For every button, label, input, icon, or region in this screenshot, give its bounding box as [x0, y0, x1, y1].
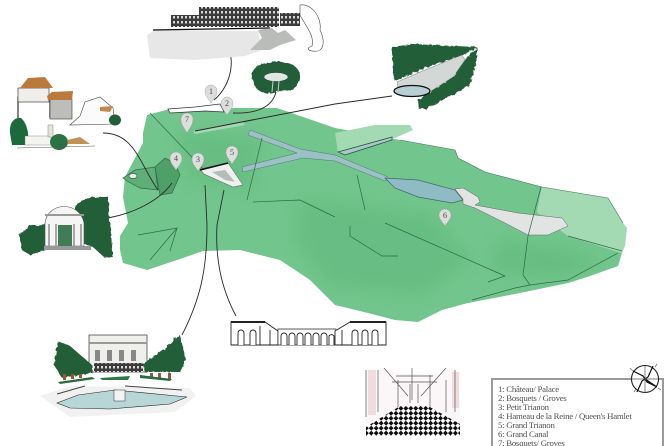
legend box: 2: Bosquets / Groves: [498, 393, 567, 403]
illustration: Hall of Mirrors gallery: [366, 368, 460, 436]
map: palace gardens: [120, 104, 627, 322]
illustration: Temple of Love: [19, 197, 113, 258]
legend box: 5: Grand Trianon: [498, 420, 555, 430]
illustration: grove with basin: [392, 44, 477, 109]
Grand Canal: [242, 130, 568, 235]
illustration: fountain grove: [252, 62, 300, 93]
legend box: 4: Hameau de la Reine / Queen's Hamlet: [498, 411, 632, 421]
pin 3: [192, 153, 204, 171]
green park area: [120, 108, 622, 322]
illustration: Hameau de la Reine: [10, 77, 121, 150]
light green estate areas: [193, 122, 627, 253]
pin 5: [226, 146, 238, 164]
location pins: [170, 85, 451, 226]
illustration: Grand Trianon: [231, 322, 386, 345]
pin 1: 1: [209, 87, 213, 96]
legend box: 3: Petit Trianon: [498, 402, 549, 412]
pin 4: 4: [174, 154, 178, 163]
Hameau grove: [123, 158, 180, 195]
pin 2: [221, 97, 233, 115]
pin 2: 2: [225, 99, 229, 108]
pin 6: 6: [443, 211, 447, 220]
pin 3: 3: [196, 155, 200, 164]
pin 6: [439, 209, 451, 226]
legend box: [491, 378, 664, 446]
callout lines: [103, 37, 392, 335]
legend box: 6: Grand Canal: [498, 429, 548, 439]
legend box: 1: Château/ Palace: [498, 384, 559, 394]
pin 4: [170, 152, 182, 170]
pin 7: [181, 113, 193, 133]
pin 5: 5: [230, 148, 234, 157]
pin 7: 7: [185, 115, 189, 124]
pin 1: [205, 85, 217, 103]
park paths: [138, 113, 623, 300]
Trianon estate: [200, 163, 243, 187]
illustration: Petit Trianon: [40, 335, 196, 417]
illustration: Château: [147, 5, 323, 60]
Château strip: [168, 104, 224, 113]
darker tonal patches: [180, 130, 600, 295]
